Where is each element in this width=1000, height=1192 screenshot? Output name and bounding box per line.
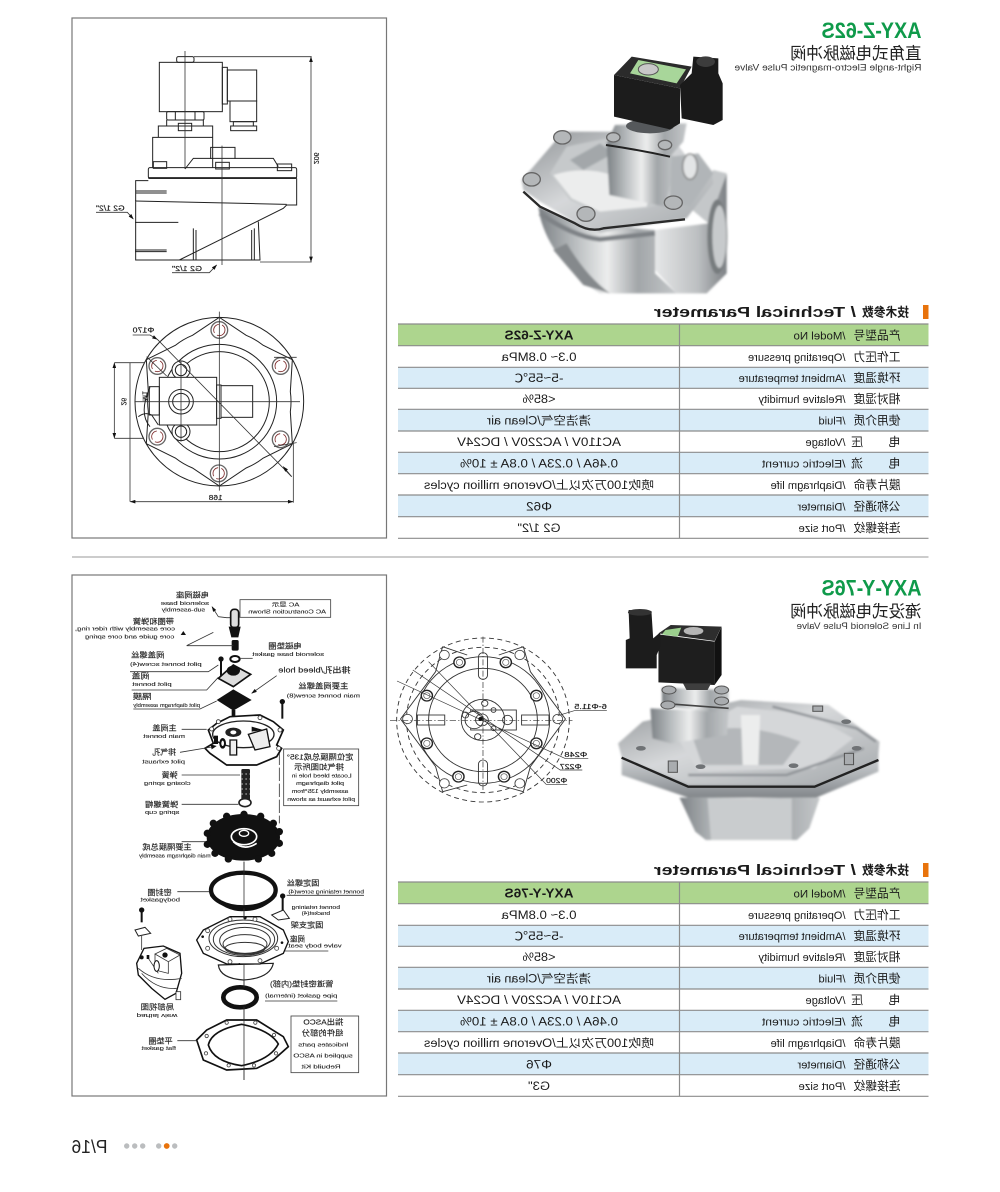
- part: pilot diaphragm: [217, 689, 252, 711]
- label: bonnet retaining screw: 固定螺丝: [286, 878, 319, 888]
- heading: AXY-Y-76S: In Line Solenoid Pulse Valve: [796, 621, 922, 631]
- row: operating pressure: [501, 908, 900, 922]
- part: pilot bonnet: [218, 665, 251, 687]
- label: main bonnet screw: main bonnet screw(8): [287, 693, 360, 699]
- row: diameter: 公称通径: [853, 1058, 900, 1072]
- part: flat gasket: [197, 1020, 288, 1070]
- label: pipe gasket: 管道密封垫(内部): [270, 979, 333, 989]
- row: electric current: [460, 1014, 900, 1028]
- label diameter 170: Φ170: [133, 327, 154, 334]
- row: relative humidity: 相对湿度: [853, 950, 900, 964]
- section heading: technical parameter 2: / Technical Parameter: [654, 862, 856, 879]
- row: relative humidity: 相对湿度: [853, 392, 900, 406]
- row: voltage: 压: [851, 435, 863, 449]
- row: relative humidity: [522, 392, 900, 406]
- row: relative humidity: /Relative humidity: [758, 952, 846, 964]
- label: solenoid base sub-assembly: 电磁阀座: [176, 590, 209, 600]
- row: electric current: 0.46A / 0.23A / 0.8A ± 10%: [460, 1016, 618, 1028]
- row: model: AXY-Y-76S: [504, 886, 574, 900]
- label: pilot diaphragm assembly: 隔膜: [132, 691, 152, 701]
- callout: locate bleed hole: 定位隔膜总成135°: [287, 751, 353, 761]
- row: port size: 连接螺纹: [853, 521, 900, 535]
- part: solenoid tube: [212, 607, 241, 662]
- valve body shading: [522, 123, 727, 293]
- table: AXY-Y-76S parameters: [398, 882, 928, 1096]
- row: diaphragm life: [424, 1036, 900, 1050]
- callout: ASCO rebuild kit: [291, 1016, 359, 1073]
- divider between products: [72, 556, 928, 558]
- label: valve body seat: 阀座: [290, 934, 305, 944]
- callout: locate bleed hole: pilot exhaust as shown: [287, 797, 355, 803]
- label: pilot exhaust: [142, 746, 185, 766]
- callout: locate bleed hole: pilot diaphragm: [296, 781, 344, 787]
- row: model: 产品型号: [854, 328, 900, 342]
- row: ambient temperature: 环境温度: [853, 371, 900, 385]
- label: pilot exhaust: pilot exhaust: [142, 760, 185, 766]
- label: main bonnet: 主阀盖: [152, 722, 177, 732]
- heading: AXY-Z-62S: Right-angle Electro-magnetic Pulse Valve: [734, 62, 922, 72]
- row: voltage: [457, 993, 900, 1007]
- label: Φ227: Φ227: [560, 763, 582, 771]
- row: port size: /Port size: [799, 523, 846, 535]
- row: diameter: [526, 500, 900, 514]
- label: pilot diaphragm assembly: [132, 691, 200, 709]
- callout: ASCO rebuild kit: 组件的部分: [301, 1027, 343, 1037]
- part: main bonnet: [205, 715, 283, 765]
- row: ambient temperature: 环境温度: [853, 929, 900, 943]
- label: partial view: [137, 1001, 178, 1018]
- footer: page dots: [124, 1143, 177, 1149]
- label: spring cup: [145, 799, 179, 816]
- label: Φ200: Φ200: [546, 777, 567, 785]
- heading: AXY-Y-76S: [790, 576, 922, 631]
- label: bonnet retaining screw: bonnet retaining screw(4): [288, 889, 364, 895]
- callout: locate bleed hole: [284, 749, 359, 806]
- row: diaphragm life: 喷吹100万次以上/Overone million cycles: [424, 478, 654, 492]
- label M1: M1: [140, 391, 147, 401]
- dimension 168: 168: [209, 495, 223, 502]
- callout: ASCO rebuild kit: Indicates parts: [298, 1043, 348, 1049]
- row: operating pressure: 工作压力: [854, 350, 900, 364]
- label: bonnet retaining bracket: bonnet retaining: [292, 905, 340, 911]
- label: body gasket: 密封圈: [147, 887, 172, 897]
- row: model: /Model No: [794, 888, 846, 900]
- row: electric current: 流: [851, 456, 863, 470]
- row: fluid: 使用介质: [853, 414, 900, 428]
- row: port size: G3": [528, 1081, 550, 1093]
- product photo: in-line valve: [618, 609, 880, 840]
- row: fluid: [487, 972, 900, 986]
- label: spring cup: 弹簧螺帽: [145, 799, 178, 809]
- label: pilot bonnet: 阀盖: [131, 671, 149, 681]
- row: diaphragm life: 喷吹100万次以上/Overone million cycles: [424, 1036, 654, 1050]
- flange drawing with diameters: [390, 637, 607, 802]
- row: voltage: AC110V / AC220V / DC24V: [457, 995, 621, 1007]
- row: electric current: [460, 456, 900, 470]
- row: ambient temperature: [514, 929, 900, 943]
- label: pipe gasket: pipe gasket (internal): [265, 994, 337, 1000]
- valve body shading: [618, 688, 880, 840]
- icon: coil: [658, 634, 715, 685]
- dimension 26: 26: [120, 398, 127, 406]
- row: diameter: Φ62: [526, 502, 552, 514]
- row: voltage: /Voltage: [806, 437, 846, 449]
- product photo: right-angle valve: [522, 56, 727, 293]
- side elevation drawing: [95, 51, 319, 273]
- row: diaphragm life: /Diaphragm life: [770, 1038, 846, 1050]
- label: 6-Φ11.5: 6-Φ11.5: [574, 703, 607, 711]
- label: bonnet retaining bracket: 固定支架: [290, 919, 323, 929]
- label: core assembly: core assembly with rider ring,: [75, 627, 175, 633]
- heading: AXY-Z-62S: AXY-Z-62S: [822, 18, 922, 43]
- label: bottom port G2 1/2: G2 1/2": [171, 266, 202, 273]
- part: closing spring: [241, 769, 250, 802]
- icon: connector: [680, 57, 723, 125]
- callout: AC construction shown: AC 显示: [271, 602, 299, 609]
- label: closing spring: closing spring: [144, 781, 191, 787]
- label: side port G2 1/2: G2 1/2": [95, 205, 125, 212]
- exploded view upper half: [75, 590, 360, 863]
- label: solenoid base sub-assembly: [161, 590, 209, 614]
- part: main bonnet screw: [280, 699, 285, 719]
- callout: locate bleed hole: 排气如图所示: [294, 761, 344, 771]
- row: voltage: 电: [888, 993, 900, 1007]
- callout: AC construction shown: AC Construction Shown: [248, 609, 326, 615]
- label: bottom port G2 1/2: [171, 265, 217, 273]
- label: solenoid base sub-assembly: sub-assembly: [162, 608, 205, 614]
- label: flat gasket: [141, 1036, 176, 1052]
- row: voltage: [457, 435, 900, 449]
- part: retaining bracket and screw: [272, 893, 289, 920]
- label: bonnet retaining bracket: bracket(4): [302, 911, 330, 917]
- row: model: /Model No: [794, 330, 846, 342]
- label: main bonnet screw: [287, 681, 360, 699]
- section heading: technical parameter 2: 技术参数: [862, 862, 909, 878]
- row: voltage: 电: [888, 435, 900, 449]
- label: valve body seat: [285, 934, 342, 951]
- row: fluid: 使用介质: [853, 972, 900, 986]
- section heading: technical parameter 1: / Technical Parameter: [654, 304, 856, 321]
- part: valve body seat: [197, 916, 288, 980]
- row: diaphragm life: 膜片寿命: [853, 1036, 900, 1050]
- row: relative humidity: [522, 950, 900, 964]
- row: diameter: /Diameter: [797, 502, 846, 514]
- heading: AXY-Z-62S: 直角式电磁脉冲阀: [790, 44, 922, 63]
- row: diameter: 公称通径: [853, 500, 900, 514]
- label: pilot exhaust: 排气孔: [152, 746, 176, 756]
- row: electric current: 流: [851, 1014, 863, 1028]
- row: port size: G2 1/2": [518, 523, 560, 535]
- row: electric current: /Electric current: [762, 458, 846, 470]
- row: port size: [518, 521, 900, 535]
- label: partial view: 局部视图: [140, 1001, 174, 1011]
- label: core assembly: 带圈和弹簧: [132, 616, 174, 626]
- section heading: technical parameter 2: [654, 862, 928, 879]
- label: pilot bonnet screw: [130, 649, 202, 668]
- footer: page number: P/16: [72, 1137, 108, 1157]
- row: voltage: 压: [851, 993, 863, 1007]
- part: main diaphragm: [204, 811, 283, 863]
- row: model: [504, 328, 900, 342]
- label: partial view: partial view: [137, 1012, 178, 1018]
- row: model: 产品型号: [854, 886, 900, 900]
- label diameter 170: [133, 327, 157, 339]
- row: ambient temperature: -5~55℃: [514, 931, 563, 943]
- label: core assembly: core guide and core spring: [85, 634, 174, 640]
- label: closing spring: [144, 770, 191, 787]
- row: operating pressure: /Operating pressure: [748, 352, 846, 364]
- panel: AXY-Y-76S exploded view: [72, 575, 386, 1096]
- row: diaphragm life: /Diaphragm life: [770, 480, 846, 492]
- row: operating pressure: 工作压力: [854, 908, 900, 922]
- part: partial view inset: [135, 907, 182, 1000]
- row: electric current: 电: [888, 1014, 900, 1028]
- label: solenoid base gasket: solenoid base gasket: [252, 652, 324, 658]
- row: electric current: /Electric current: [762, 1016, 846, 1028]
- row: model: [504, 886, 900, 900]
- heading: AXY-Y-76S: 淹没式电磁脉冲阀: [790, 602, 922, 621]
- row: ambient temperature: -5~55℃: [514, 373, 563, 385]
- label: bleed hole: 排出孔/bleed hole: [278, 665, 351, 675]
- callout: ASCO rebuild kit: Rebuild Kit: [301, 1064, 341, 1070]
- row: ambient temperature: /Ambient temperature: [738, 373, 846, 385]
- row: port size: [528, 1079, 900, 1093]
- label: main diaphragm assembly: [139, 842, 211, 860]
- panel: AXY-Z-62S technical drawings: [72, 18, 386, 538]
- row: operating pressure: [501, 350, 900, 364]
- label: core assembly: [75, 616, 175, 640]
- row: diaphragm life: [424, 478, 900, 492]
- part: pipe gasket: [223, 987, 257, 1007]
- label: valve body seat: valve body seat: [288, 944, 342, 950]
- label: solenoid base sub-assembly: solenoid base: [161, 601, 209, 607]
- label: side port G2 1/2: [95, 205, 133, 219]
- heading: AXY-Y-76S: AXY-Y-76S: [822, 576, 922, 600]
- row: fluid: [487, 414, 900, 428]
- section heading: technical parameter 1: [654, 304, 928, 321]
- section heading: technical parameter 1: 技术参数: [862, 304, 909, 320]
- label: main diaphragm assembly: 主要隔膜总成: [142, 842, 192, 852]
- row: voltage: /Voltage: [806, 995, 846, 1007]
- row: operating pressure: 0.3~ 0.8MPa: [501, 352, 576, 364]
- label: main bonnet: main bonnet: [143, 734, 185, 740]
- dimension 206: 206: [312, 152, 319, 164]
- row: diameter: [526, 1058, 900, 1072]
- plan view drawing: [114, 312, 304, 503]
- label: body gasket: bodygasket: [140, 898, 180, 904]
- label: pilot bonnet: pilot bonnet: [132, 682, 172, 688]
- label: pilot bonnet: [131, 671, 172, 688]
- row: relative humidity: <85%: [522, 952, 556, 964]
- row: fluid: 清洁空气/Clean air: [487, 414, 591, 428]
- row: electric current: 0.46A / 0.23A / 0.8A ± 10%: [460, 458, 618, 470]
- bolt holes: [421, 657, 542, 782]
- label: closing spring: 弹簧: [161, 770, 178, 780]
- bolt holes: [149, 322, 289, 482]
- icon: connector: [626, 610, 660, 668]
- row: operating pressure: /Operating pressure: [748, 910, 846, 922]
- label: flat gasket: flat gasket: [141, 1046, 176, 1052]
- icon: coil: [614, 75, 680, 129]
- callout: ASCO rebuild kit: supplied in ASCO: [293, 1053, 353, 1059]
- label: pilot diaphragm assembly: pilot diaphragm assembly: [133, 703, 200, 709]
- part: spring cup: [239, 799, 251, 807]
- bolts: [523, 131, 682, 221]
- label: main bonnet: [143, 722, 185, 740]
- row: fluid: /Fluid: [818, 974, 846, 986]
- label: Φ248: Φ248: [564, 751, 587, 759]
- callout: locate bleed hole: Locate bleed hole in: [292, 773, 352, 779]
- row: ambient temperature: [514, 371, 900, 385]
- row: port size: 连接螺纹: [853, 1079, 900, 1093]
- label: flat gasket: 平垫圈: [148, 1036, 173, 1046]
- label: pilot bonnet screw: pilot bonnet screw(4): [130, 662, 202, 668]
- label: bonnet retaining screw: [286, 878, 364, 895]
- label: main bonnet screw: 主要阀盖螺丝: [298, 681, 348, 691]
- callout: locate bleed hole: assembly 135°from: [292, 789, 348, 795]
- row: fluid: /Fluid: [818, 416, 846, 428]
- row: diaphragm life: 膜片寿命: [853, 478, 900, 492]
- row: model: AXY-Z-62S: [504, 328, 574, 342]
- label: pipe gasket: [265, 979, 337, 1001]
- row: ambient temperature: /Ambient temperature: [738, 931, 846, 943]
- label: main diaphragm assembly: main diaphragm assembly: [139, 854, 211, 860]
- label: spring cup: spring cup: [145, 810, 179, 816]
- row: fluid: 清洁空气/Clean air: [487, 972, 591, 986]
- row: port size: /Port size: [799, 1081, 846, 1093]
- row: diameter: Φ76: [526, 1060, 552, 1072]
- label: body gasket: [140, 887, 180, 904]
- row: relative humidity: /Relative humidity: [758, 394, 846, 406]
- callout: ASCO rebuild kit: 指出ASCO: [303, 1017, 343, 1027]
- label: bonnet retaining bracket: [290, 905, 340, 929]
- row: relative humidity: <85%: [522, 394, 556, 406]
- exploded view lower half: [135, 842, 364, 1080]
- row: diameter: /Diameter: [797, 1060, 846, 1072]
- table: AXY-Z-62S parameters: [398, 324, 928, 538]
- bolts: [661, 686, 854, 772]
- label: solenoid base gasket: [252, 641, 324, 658]
- row: voltage: AC110V / AC220V / DC24V: [457, 437, 621, 449]
- label: pilot bonnet screw: 阀盖螺丝: [131, 649, 164, 659]
- row: operating pressure: 0.3~ 0.8MPa: [501, 910, 576, 922]
- row: electric current: 电: [888, 456, 900, 470]
- part: body gasket: [211, 873, 276, 910]
- callout: AC construction shown: [240, 600, 331, 617]
- label: solenoid base gasket: 电磁垫圈: [268, 641, 302, 651]
- heading: AXY-Z-62S: [734, 18, 922, 72]
- part: pilot bonnet screw: [218, 656, 224, 676]
